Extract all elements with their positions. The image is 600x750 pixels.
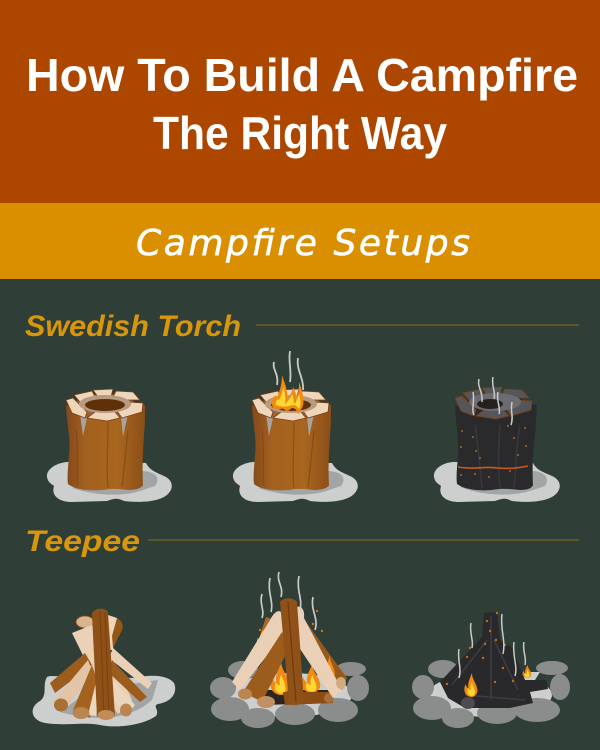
title banner (0, 0, 600, 203)
smoke (274, 351, 303, 390)
heading: Teepee: Teepee (25, 525, 140, 558)
illustration: burning teepee with stone ring (210, 572, 369, 728)
illustration: charred Swedish torch (434, 377, 560, 502)
smoke (459, 614, 525, 678)
back logs (256, 617, 274, 652)
stones (412, 660, 570, 728)
illustration: burning Swedish torch (233, 351, 358, 502)
flames (464, 665, 531, 697)
illustration: charred teepee with stone ring (412, 612, 570, 728)
section banner: Campfire Setups (0, 203, 600, 279)
smoke (473, 377, 512, 425)
title: How To Build A Campfire (26, 49, 578, 101)
title (26, 49, 578, 159)
flames (257, 629, 335, 695)
illustration: unlit teepee (33, 609, 175, 726)
sparks (259, 610, 323, 632)
embers (460, 425, 527, 478)
smoke (261, 572, 316, 630)
back logs (106, 615, 117, 650)
title: The Right Way (153, 107, 447, 159)
section banner: Campfire Setups: Campfire Setups (136, 223, 470, 264)
charred logs (440, 612, 548, 708)
bright gap (528, 672, 540, 680)
heading: Swedish Torch: Swedish Torch (25, 310, 241, 343)
illustration: unlit Swedish torch (47, 389, 172, 502)
central log (280, 598, 304, 705)
flames (272, 375, 303, 414)
stones (210, 661, 369, 728)
central log (92, 609, 115, 719)
embers (446, 612, 514, 685)
